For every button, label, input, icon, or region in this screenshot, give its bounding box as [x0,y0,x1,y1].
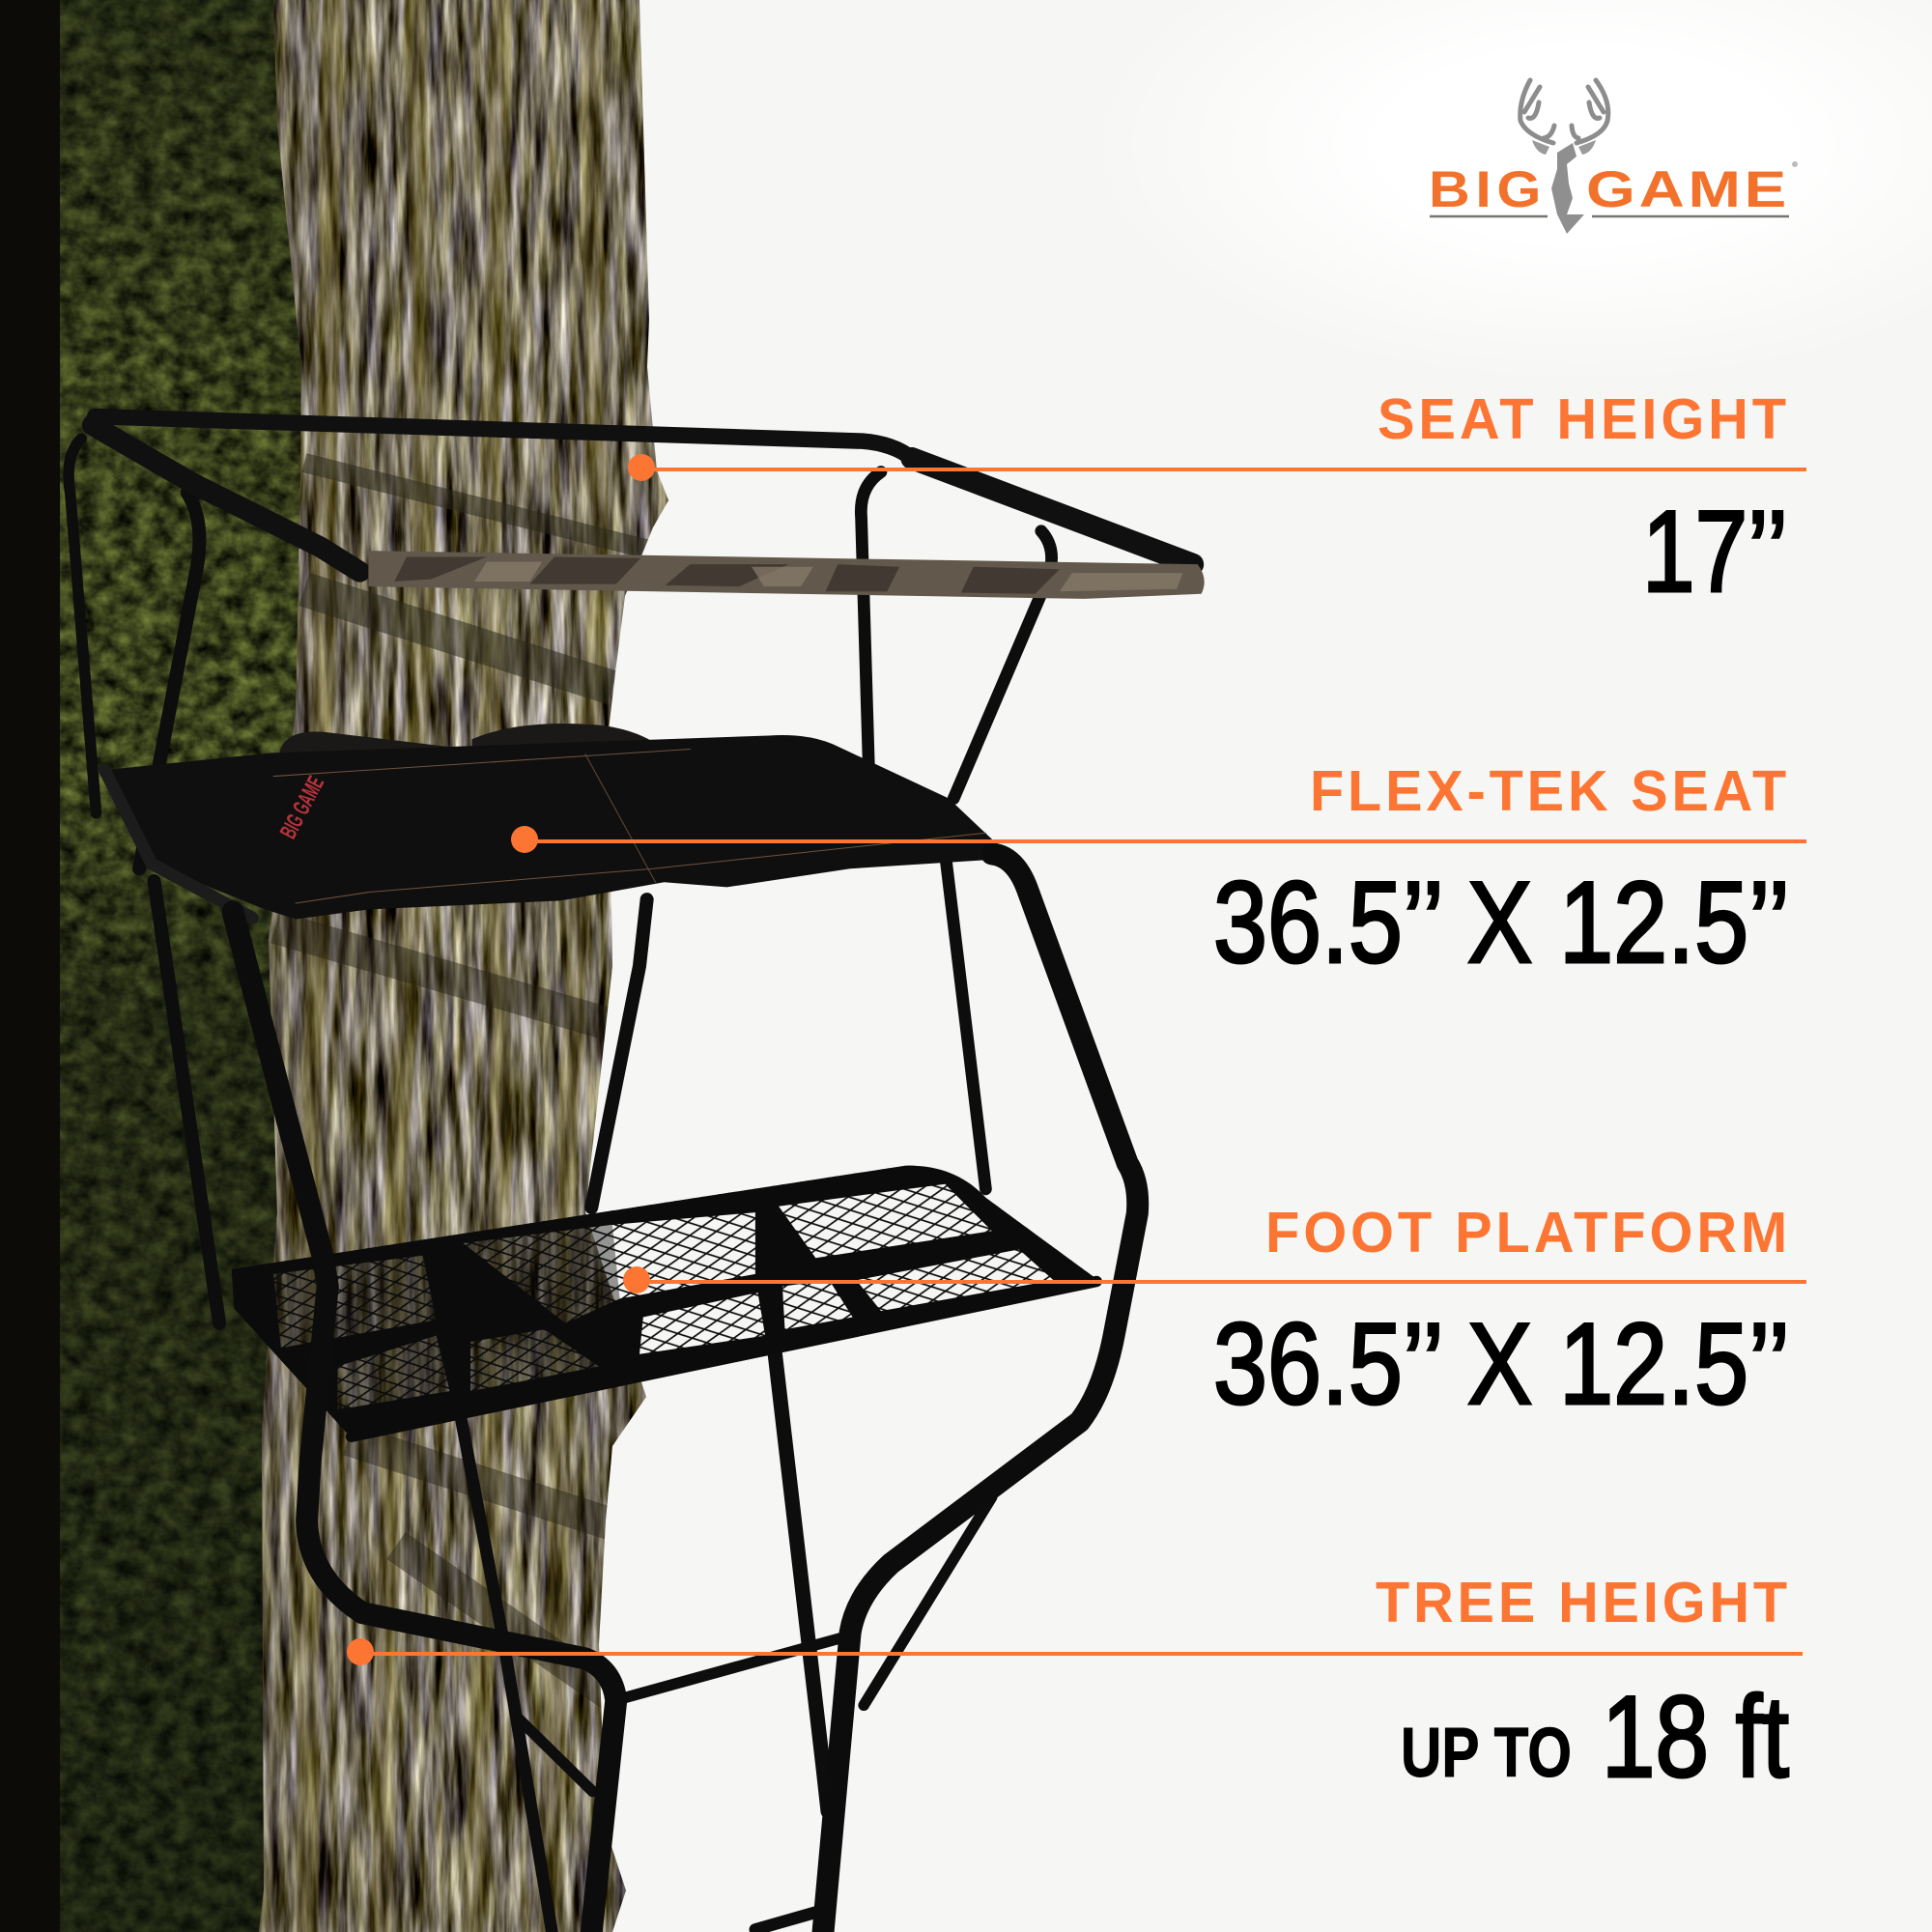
foot platform [222,1158,1109,1448]
seat logo: BIG GAME [275,772,329,843]
callout: flex-tek seat: FLEX-TEK SEAT [1310,759,1790,823]
panel: tree trunk [242,0,686,1932]
callout: seat height: 17’’ [1642,487,1788,616]
camo padded rail [368,551,1205,599]
callout: foot platform: 36.5’’ X 12.5’’ [1213,1299,1790,1429]
logo: Big Game: GAME [1586,161,1790,218]
callout: foot platform [623,1201,1806,1429]
callout: flex-tek seat [511,759,1806,987]
seat straps [280,724,653,766]
callout: seat height: SEAT HEIGHT [1378,387,1790,451]
panel: forest backdrop [0,0,319,1932]
callout: flex-tek seat: 36.5’’ X 12.5’’ [1213,858,1790,987]
top rail [93,416,1193,572]
callout: seat height [628,387,1806,616]
illustration: ladder stand [69,416,1205,1932]
outer frame [233,854,1138,1932]
callout: tree height: UP TO [1401,1715,1572,1792]
logo: Big Game [1429,80,1798,234]
callout: foot platform: FOOT PLATFORM [1265,1201,1791,1264]
logo wordmark: BIG [1429,161,1547,218]
logo glow [1082,0,1932,386]
uprights and braces [69,439,1052,1932]
callout: tree height: TREE HEIGHT [1376,1571,1791,1634]
callout: tree height [347,1571,1803,1802]
flex-tek seat [104,735,993,920]
callout: tree height: 18 ft [1602,1672,1789,1802]
icon: deer antlers and head [1520,80,1608,234]
